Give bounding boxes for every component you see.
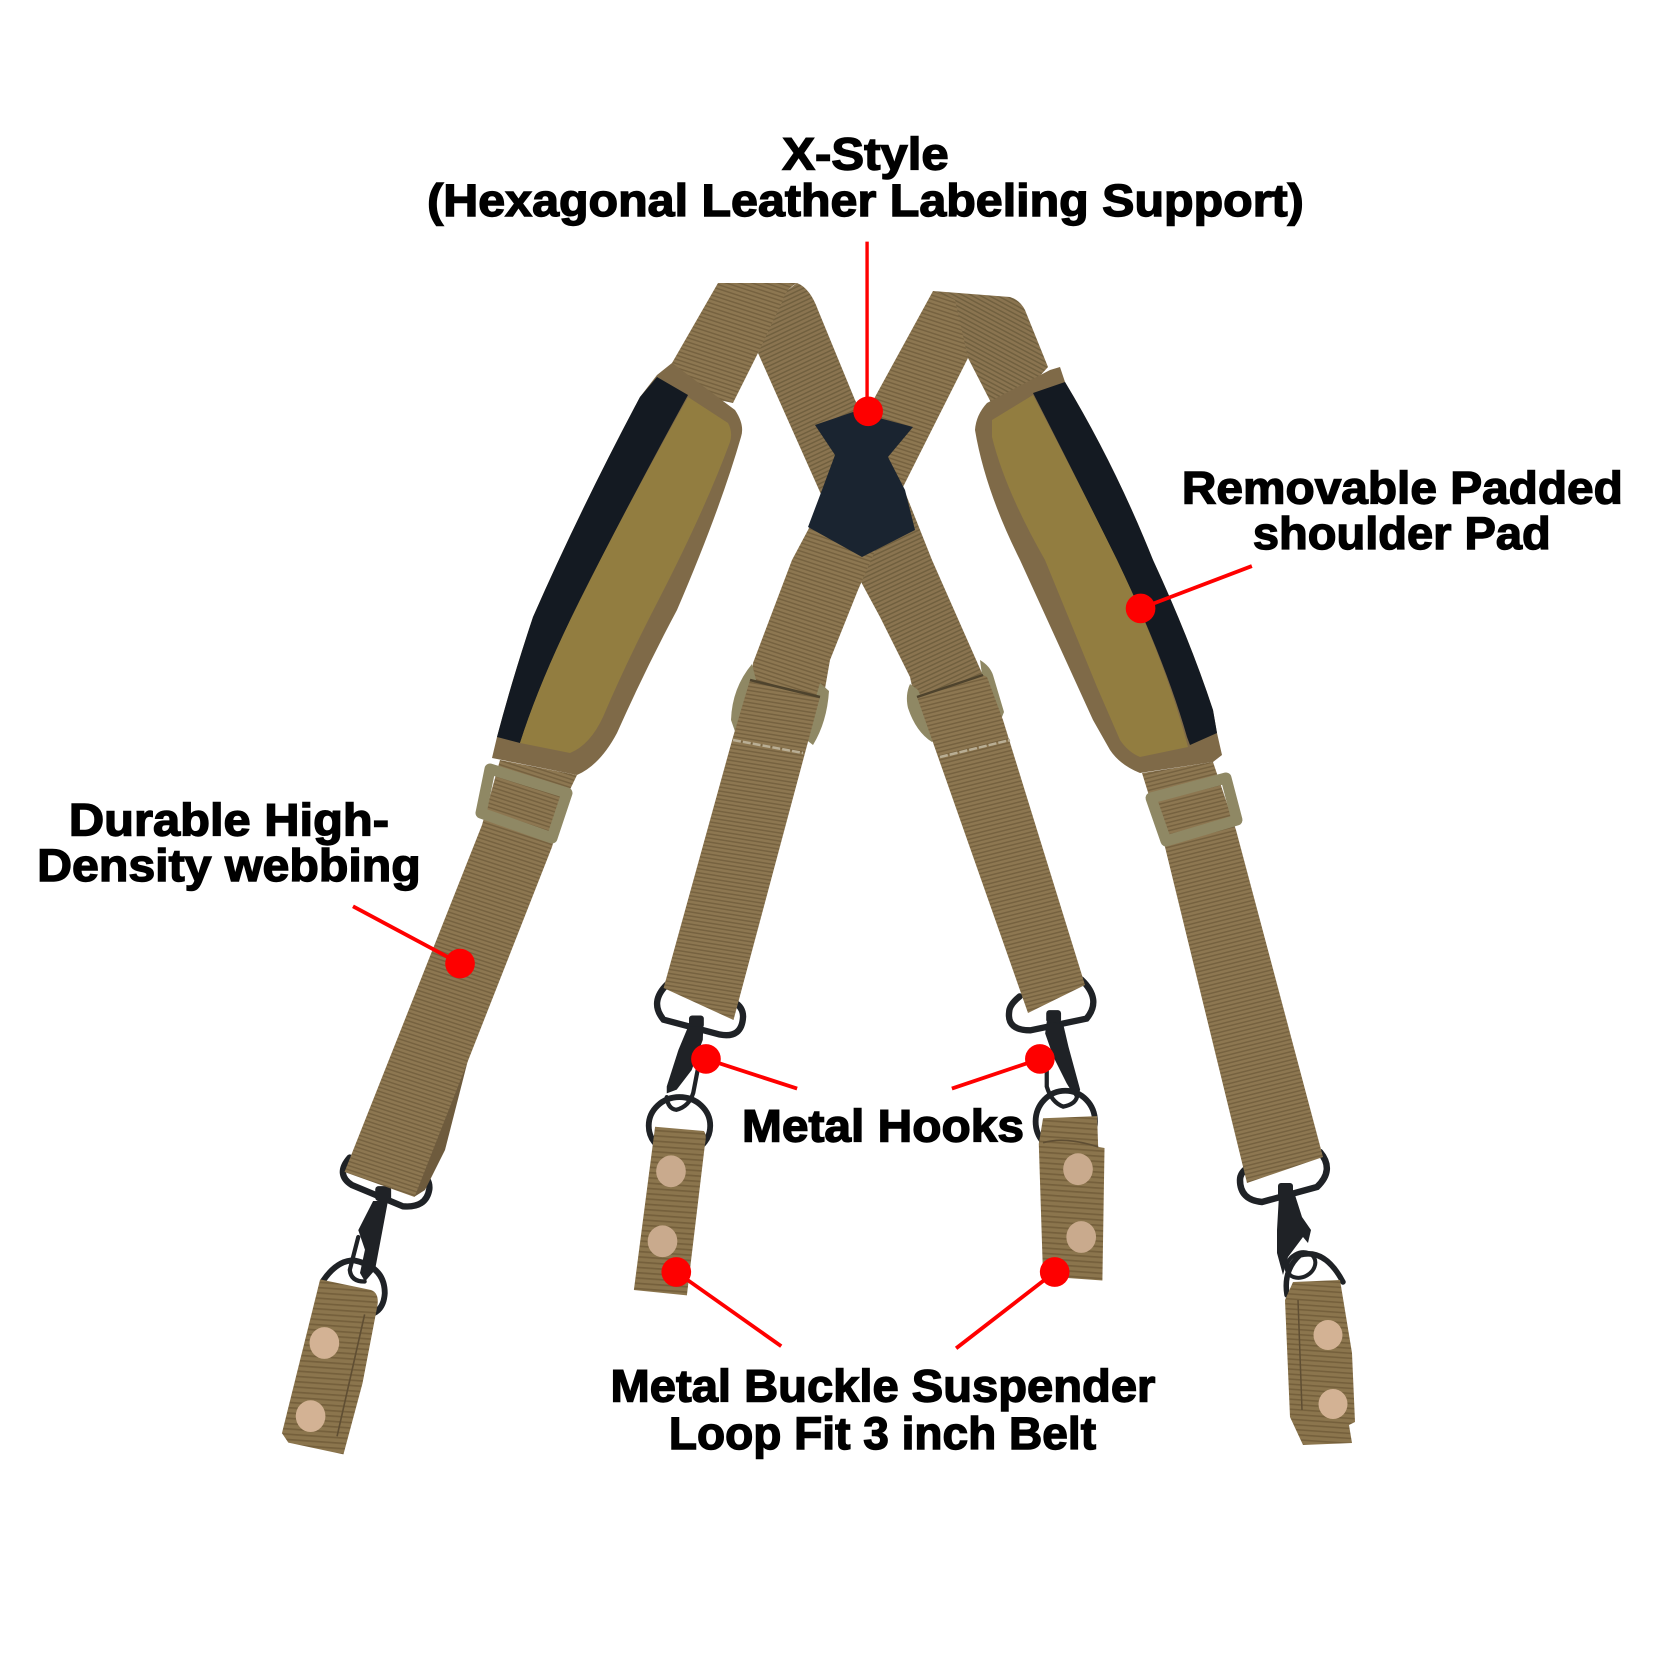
label: webbing: [37, 794, 421, 891]
callout: left buckle loop pointer: [661, 1257, 781, 1346]
right pad buckle: [1151, 778, 1237, 841]
label: buckle loop: Loop Fit 3 inch Belt: [669, 1408, 1096, 1459]
label: removable pad: [1182, 462, 1623, 559]
left outer belt loop: [282, 1279, 378, 1454]
callout: left metal hook pointer: [691, 1044, 797, 1089]
left inner belt loop: [634, 1127, 706, 1295]
callout: webbing pointer: [353, 906, 475, 978]
left inner buckle tabs: [731, 664, 829, 745]
right inner hook and ring: [1009, 979, 1095, 1152]
callout: right buckle loop pointer: [956, 1257, 1070, 1348]
right shoulder pad: [975, 367, 1222, 773]
right outer belt loop: [1285, 1280, 1355, 1445]
right long strap: [1142, 762, 1323, 1183]
label: webbing: Durable High-: [69, 794, 389, 845]
right inner lower strap: [917, 675, 1085, 1013]
right shoulder strap crossing to left inner leg: [750, 291, 968, 700]
label: webbing: Density webbing: [37, 840, 421, 891]
right shoulder back strap: [933, 291, 1048, 420]
left inner lower strap: [664, 680, 820, 1020]
callout: right metal hook pointer: [952, 1044, 1055, 1089]
callout: shoulder pad pointer: [1126, 566, 1252, 623]
label: metal hooks: Metal Hooks: [742, 1101, 1024, 1152]
heading: x-style: X-Style: [782, 129, 949, 180]
left shoulder front strap: [672, 283, 797, 403]
label: buckle loop: Metal Buckle Suspender: [611, 1360, 1156, 1411]
left outer hook and ring: [323, 1158, 429, 1314]
left long strap: [344, 760, 577, 1197]
label: buckle loop: [611, 1360, 1156, 1459]
right inner buckle tabs: [907, 660, 1004, 742]
left shoulder strap crossing to right inner leg: [758, 283, 985, 710]
right outer hook and ring: [1240, 1152, 1343, 1295]
heading: x-style: (Hexagonal Leather Labeling Support): [427, 175, 1304, 226]
left inner hook and ring: [649, 984, 743, 1154]
callout: x-style pointer: [853, 242, 883, 426]
left pad buckle: [481, 769, 567, 838]
leather hexagonal patch: [808, 412, 915, 557]
right inner belt loop: [1039, 1116, 1105, 1280]
heading: x-style: [427, 129, 1304, 226]
label: removable pad: Removable Padded: [1182, 462, 1623, 513]
left shoulder pad: [492, 363, 742, 775]
label: removable pad: shoulder Pad: [1253, 508, 1551, 559]
